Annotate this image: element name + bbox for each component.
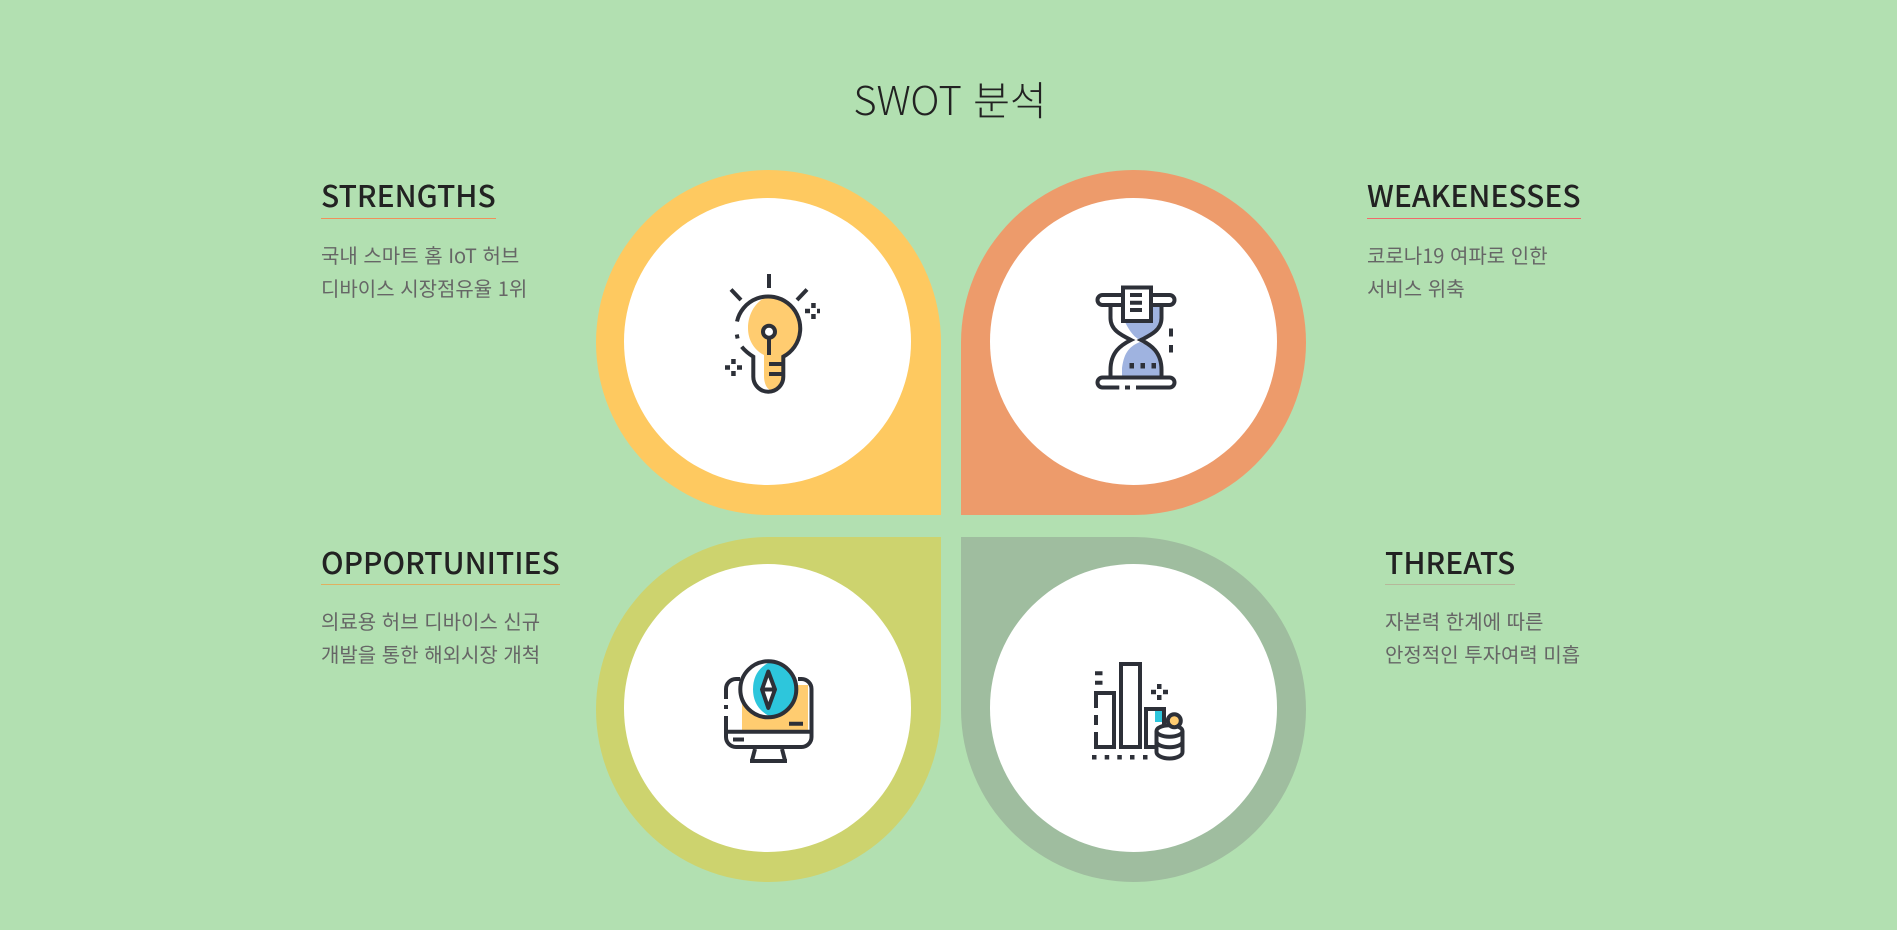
title: SWOT 분석 <box>853 69 1047 127</box>
text: opportunities description <box>321 606 540 668</box>
text: opportunities description: 의료용 허브 디바이스 신규 <box>321 606 540 635</box>
panel: strengths petal <box>596 170 941 515</box>
text: strengths description <box>321 240 527 302</box>
heading: strengths: STRENGTHS <box>321 172 496 216</box>
white circle <box>990 198 1277 485</box>
icon: light bulb <box>725 274 820 394</box>
white circle <box>990 564 1277 852</box>
white circle <box>624 564 911 852</box>
text: threats description <box>1385 606 1580 668</box>
heading: weaknesses: WEAKENESSES <box>1367 172 1581 216</box>
icon: bar chart with coins <box>1092 662 1184 760</box>
text: weaknesses description: 서비스 위축 <box>1367 272 1465 302</box>
heading: threats: THREATS <box>1385 539 1515 583</box>
text: strengths description: 국내 스마트 홈 IoT 허브 <box>321 240 519 269</box>
text: weaknesses description <box>1367 240 1548 302</box>
panel: opportunities text <box>321 539 560 668</box>
text: threats description: 자본력 한계에 따른 <box>1385 606 1543 635</box>
panel: threats petal <box>961 537 1306 882</box>
text: opportunities description: 개발을 통한 해외시장 개척 <box>321 638 540 668</box>
text: weaknesses description: 코로나19 여파로 인한 <box>1367 240 1548 269</box>
heading: opportunities: OPPORTUNITIES <box>321 539 560 583</box>
panel: strengths text <box>321 172 527 302</box>
panel: weaknesses text <box>1367 172 1581 302</box>
panel: opportunities petal <box>596 537 941 882</box>
text: threats description: 안정적인 투자여력 미흡 <box>1385 638 1580 668</box>
panel: threats text <box>1385 539 1580 668</box>
white circle <box>624 198 911 485</box>
text: strengths description: 디바이스 시장점유율 1위 <box>321 272 527 302</box>
icon: monitor with compass <box>724 659 814 763</box>
icon: hourglass <box>1096 286 1176 390</box>
panel: weaknesses petal <box>961 170 1306 515</box>
